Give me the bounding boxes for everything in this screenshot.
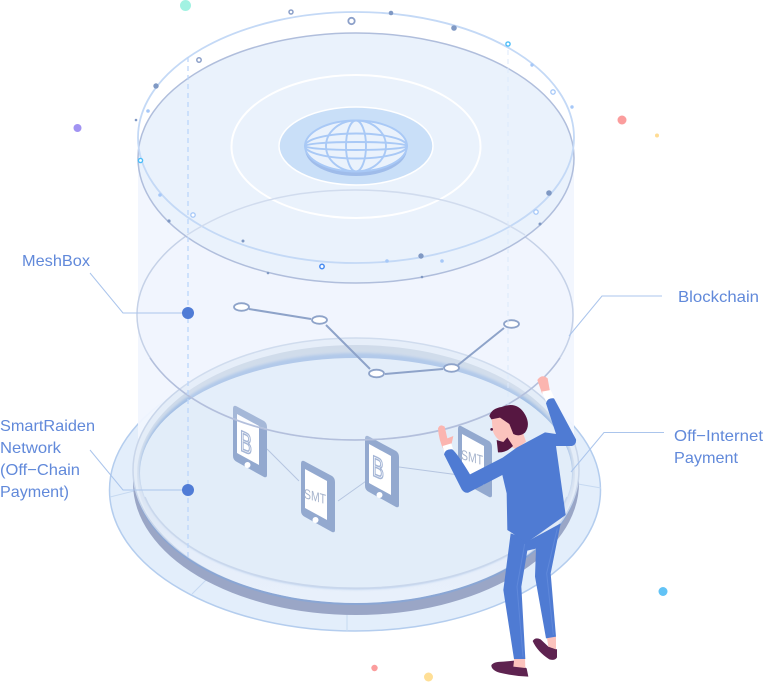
floating dot: teal <box>180 0 191 11</box>
wave ring <box>232 75 480 218</box>
bitcoin glyph 2: B <box>372 450 384 487</box>
label: MeshBox with leader <box>22 253 194 319</box>
label: Off-Internet Payment with leader: Payment <box>674 450 739 467</box>
middle layer ring <box>137 190 573 440</box>
bitcoin glyph 1: B <box>240 425 252 462</box>
glass cylinder body <box>138 158 574 473</box>
icon: phone with bitcoin 2 <box>365 436 399 507</box>
blockchain node network <box>234 303 519 377</box>
orbit particles <box>135 10 574 278</box>
upper glass ring <box>138 12 574 263</box>
neck and face <box>492 410 526 449</box>
phone connection lines <box>267 449 459 501</box>
icon: phone with bitcoin 1 <box>233 406 267 477</box>
label: Off-Internet Payment with leader: Off−Internet <box>674 428 764 445</box>
jacket with arms <box>444 398 576 543</box>
beard <box>497 437 513 452</box>
icon: globe <box>305 120 407 176</box>
eye <box>490 428 493 431</box>
floating dot: sky blue <box>658 587 668 596</box>
label: MeshBox with leader: MeshBox <box>22 253 90 270</box>
floating dot: coral <box>618 116 626 124</box>
dashed guide lines <box>188 50 508 558</box>
hands <box>438 425 453 451</box>
label: Blockchain with leader <box>569 289 759 336</box>
SMT label 1: SMT <box>304 486 326 508</box>
floating dot: yellow <box>424 672 433 682</box>
ankles <box>547 636 556 649</box>
label: SmartRaiden Network with leader <box>0 418 194 501</box>
floating dot: small yellow <box>655 134 659 138</box>
platform <box>133 338 579 615</box>
front edge of middle ring <box>150 358 560 440</box>
globe halo <box>279 107 433 185</box>
middle ring seen through top disc <box>187 190 525 235</box>
floating dot: purple <box>74 124 82 132</box>
shoes <box>533 638 557 660</box>
legs <box>503 523 561 659</box>
label: SmartRaiden Network with leader: Payment) <box>0 484 69 501</box>
icon: phone with SMT 2 <box>458 426 492 497</box>
man figure <box>438 376 576 677</box>
label: SmartRaiden Network with leader: (Off−Chain <box>0 462 80 479</box>
label: SmartRaiden Network with leader: SmartRaiden <box>0 418 95 435</box>
icon: phone with SMT 1 <box>301 461 335 532</box>
SMT label 2: SMT <box>461 447 483 469</box>
label: Off-Internet Payment with leader <box>571 428 764 472</box>
bottom base disc <box>110 349 601 631</box>
label: Blockchain with leader: Blockchain <box>678 289 759 306</box>
label: SmartRaiden Network with leader: Network <box>0 440 62 457</box>
floating dot: small coral <box>371 665 378 671</box>
top disc <box>138 12 574 283</box>
hair <box>489 405 528 435</box>
